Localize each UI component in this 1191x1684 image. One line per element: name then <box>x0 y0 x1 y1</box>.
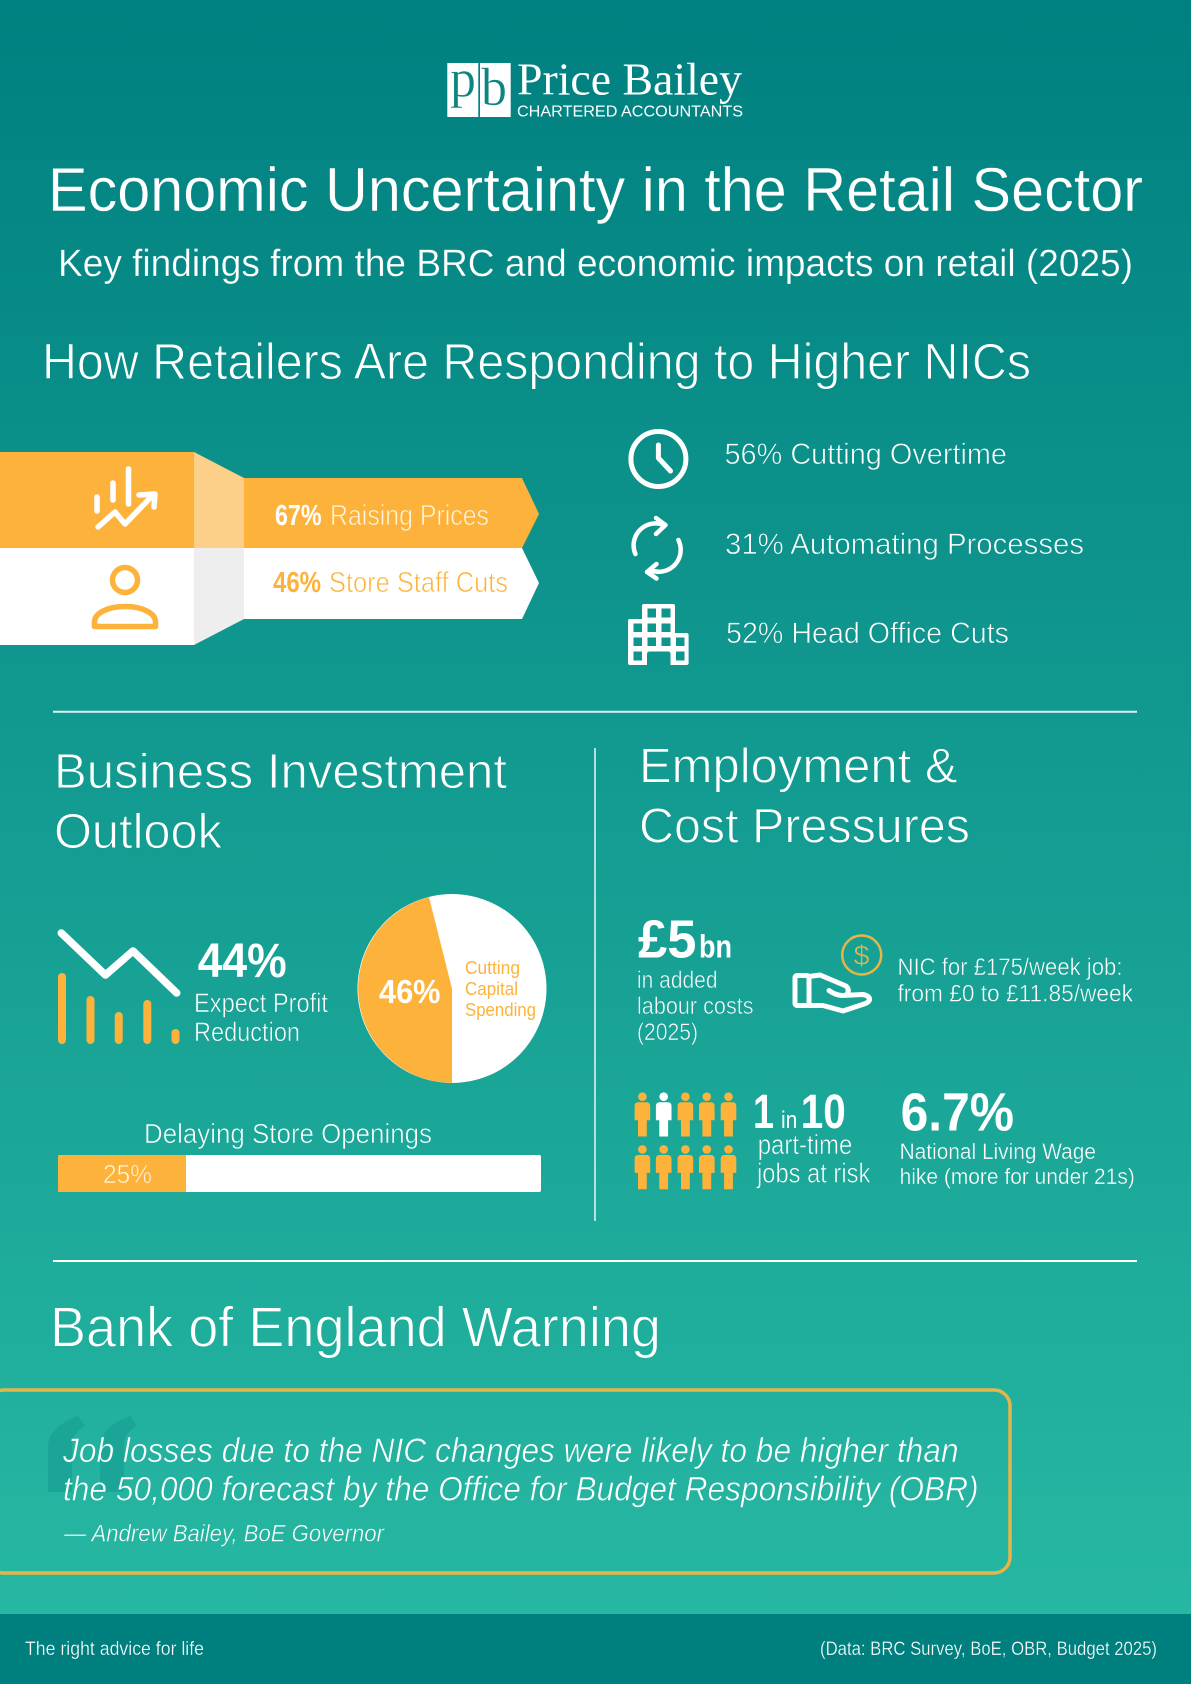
logo mark: pb <box>447 49 511 117</box>
quote text: Job losses due to the NIC changes were likely to be higher than <box>62 1432 959 1470</box>
label: 67% raising prices: 67% <box>275 500 322 532</box>
footer tagline: The right advice for life <box>25 1639 204 1660</box>
stat: £5bn: bn <box>699 929 732 965</box>
stat: £5bn: £5 <box>638 910 696 970</box>
panel: folded ribbons <box>0 452 539 645</box>
heading: employment and cost pressures: Employment & <box>639 739 958 794</box>
label: in added labour costs: labour costs <box>637 993 754 1020</box>
heading: how retailers are responding: How Retailers Are Responding to Higher NICs <box>42 333 1031 390</box>
icon: refresh arrows <box>634 518 681 578</box>
panel: employment and cost pressures <box>635 739 1135 1189</box>
text: 31% automating processes: 31% Automating Processes <box>725 528 1084 561</box>
pie chart: cutting capital spending: Cutting <box>465 958 520 978</box>
label: part-time jobs at risk <box>756 1129 871 1189</box>
label: 67% raising prices <box>275 500 489 532</box>
heading: employment and cost pressures <box>639 739 970 854</box>
quote box outline <box>0 1390 1010 1573</box>
pie chart: cutting capital spending: Capital <box>465 979 518 999</box>
pie chart: cutting capital spending: Spending <box>465 1000 536 1020</box>
subtitle: Key findings from the BRC and economic impacts on retail (2025) <box>58 243 1133 285</box>
stat: £5bn <box>638 910 732 970</box>
footer band <box>0 1614 1191 1684</box>
logo mark: pb: b <box>481 57 507 117</box>
label: 46% store staff cuts: Store Staff Cuts <box>329 567 508 599</box>
label: in added labour costs <box>637 967 754 1046</box>
progress bar: 25% <box>58 1155 541 1192</box>
label: 67% raising prices: Raising Prices <box>330 500 489 532</box>
text: 52% head office cuts: 52% Head Office Cuts <box>726 617 1009 650</box>
heading: business investment outlook: Business Investment <box>54 744 507 799</box>
icon: hand with coin: $ <box>854 940 870 971</box>
heading: business investment outlook <box>54 744 507 859</box>
label: in added labour costs: in added <box>637 967 718 994</box>
quote attribution: — Andrew Bailey, BoE Governor <box>63 1521 385 1548</box>
label: national living wage hike <box>900 1139 1135 1189</box>
icon: clock <box>631 432 686 486</box>
label: expect profit reduction: Expect Profit <box>194 988 329 1018</box>
panel: quote callout <box>0 1390 1010 1573</box>
logo mark: pb: p <box>450 49 476 109</box>
logo tagline: CHARTERED ACCOUNTANTS <box>517 104 743 121</box>
icon: quotation mark <box>48 1416 137 1492</box>
label: expect profit reduction <box>194 988 329 1047</box>
text: 56% cutting overtime: 56% Cutting Overtime <box>724 438 1007 471</box>
text: NIC for £175/week job: NIC for £175/week job: <box>898 954 1122 981</box>
logo: Price Bailey <box>447 49 743 121</box>
pie chart: cutting capital spending <box>358 894 546 1083</box>
stat: 1 in 10: 10 <box>801 1086 846 1139</box>
icon: falling profit chart <box>58 933 180 1044</box>
title: Economic Uncertainty in the Retail Sector <box>48 155 1143 225</box>
heading: employment and cost pressures: Cost Pressures <box>639 799 970 854</box>
stat: 6.7%: 6.7% <box>901 1083 1014 1143</box>
heading: bank of england warning: Bank of England Warning <box>50 1296 661 1359</box>
text: NIC for £175/week job <box>898 954 1134 1008</box>
stat: 1 in 10: 1 <box>753 1086 774 1139</box>
icon: hand with coin <box>795 936 881 1011</box>
quote text <box>62 1432 979 1509</box>
label: national living wage hike: hike (more for under 21s) <box>900 1164 1135 1189</box>
progress bar: 25%: 25% <box>103 1159 152 1189</box>
label: national living wage hike: National Living Wage <box>900 1139 1096 1164</box>
pie chart: cutting capital spending: 46% <box>379 973 440 1010</box>
ribbon: store staff cuts <box>0 548 539 645</box>
quote text: the 50,000 forecast by the Office for Budget Responsibility (OBR) <box>63 1471 979 1509</box>
icon: office building <box>628 604 689 665</box>
stat: 1 in 10 <box>753 1086 846 1139</box>
panel: business investment outlook <box>54 744 546 1192</box>
icon: person <box>94 568 156 626</box>
label: in added labour costs: (2025) <box>637 1019 698 1046</box>
text: NIC for £175/week job: from £0 to £11.85/week <box>898 981 1134 1008</box>
label: 46% store staff cuts <box>273 567 508 599</box>
label: expect profit reduction: Reduction <box>194 1017 300 1047</box>
label: delaying store openings: Delaying Store Openings <box>144 1118 432 1149</box>
label: part-time jobs at risk: jobs at risk <box>756 1158 871 1189</box>
ribbon: raising prices <box>0 452 539 548</box>
logo wordmark: Price Bailey <box>517 53 742 104</box>
icon: rising chart <box>97 469 155 527</box>
stat: 44%: 44% <box>198 935 287 988</box>
panel: other responses <box>628 432 1084 665</box>
label: part-time jobs at risk: part-time <box>758 1129 852 1160</box>
heading: business investment outlook: Outlook <box>54 804 222 859</box>
stat: 1 in 10: in <box>781 1107 797 1134</box>
icon: ten people <box>635 1092 736 1189</box>
label: 46% store staff cuts: 46% <box>273 567 321 599</box>
